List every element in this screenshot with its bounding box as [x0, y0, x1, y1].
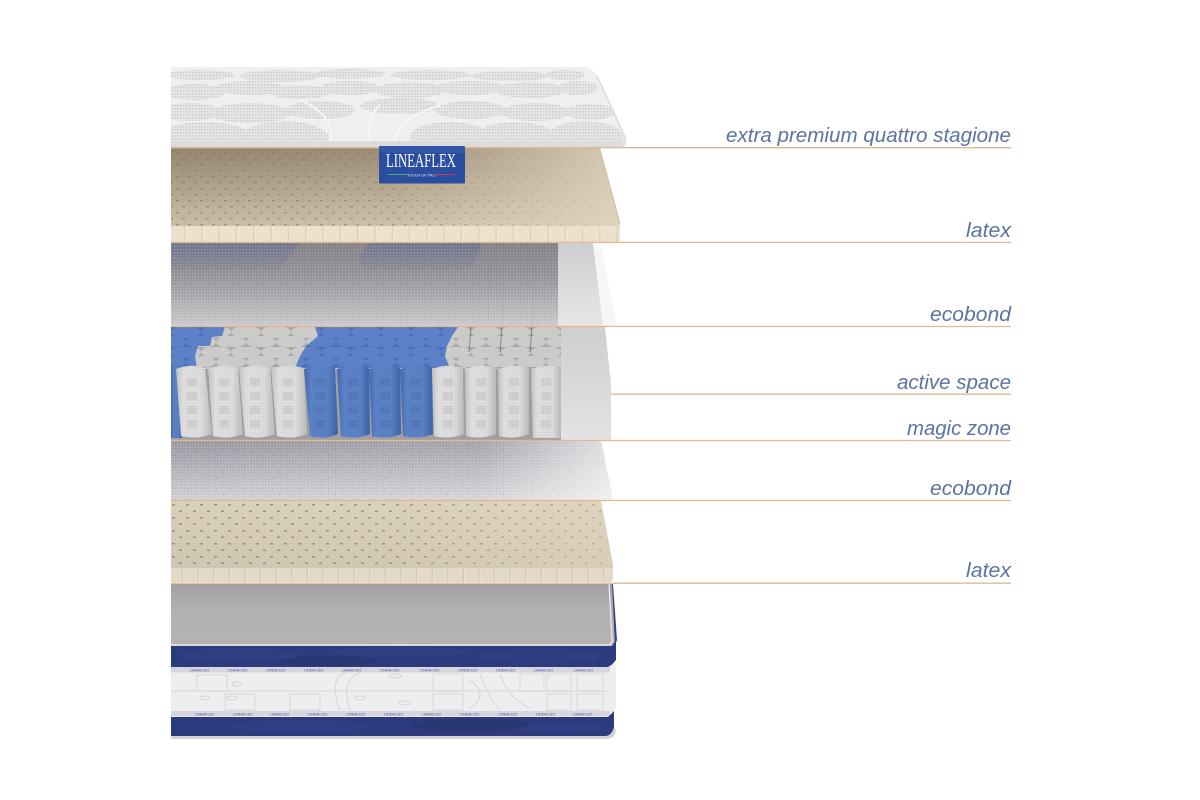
inner tray	[171, 584, 615, 646]
front springs	[171, 365, 561, 438]
quilted white band: LINEAFLEX	[422, 712, 442, 716]
panel: pocket springs layer	[171, 327, 611, 440]
quilted white band: LINEAFLEX	[573, 712, 593, 716]
latex side band	[171, 226, 620, 242]
label: magic zone: magic zone	[907, 418, 1011, 440]
label: active space: active space	[897, 372, 1011, 394]
quilted white band: LINEAFLEX	[380, 668, 400, 672]
quilted white band: LINEAFLEX	[190, 668, 210, 672]
quilted white band: LINEAFLEX	[384, 712, 404, 716]
latex lower side band	[171, 568, 613, 582]
ghost spring pattern	[171, 243, 482, 262]
quilted white band: LINEAFLEX	[460, 712, 480, 716]
label: ecobond: ecobond	[930, 304, 1012, 326]
upper navy band	[171, 640, 616, 667]
quilted white band: LINEAFLEX	[308, 712, 328, 716]
panel: latex layer upper	[171, 148, 620, 242]
quilted white band: LINEAFLEX	[304, 668, 324, 672]
label: extra premium quattro stagione: extra premium quattro stagione	[726, 125, 1011, 147]
quilted white band: LINEAFLEX	[536, 712, 556, 716]
quilted white band: LINEAFLEX	[195, 712, 215, 716]
quilted white band: LINEAFLEX	[233, 712, 253, 716]
latex lower perforation dots	[171, 503, 603, 568]
lower navy band	[171, 711, 614, 736]
panel: ecobond layer lower	[171, 441, 613, 500]
quilted white band	[171, 662, 616, 716]
leader lines	[171, 148, 1011, 583]
label: latex lower: latex	[966, 560, 1012, 582]
quilted white band: LINEAFLEX	[496, 668, 516, 672]
latex perforation dots	[171, 150, 601, 226]
panel: mattress base cover	[171, 584, 617, 739]
quilted white band: LINEAFLEX	[266, 668, 286, 672]
quilted white band: LINEAFLEX	[270, 712, 290, 716]
panel: extra premium quilted top layer	[171, 67, 626, 147]
quilted white band: LINEAFLEX	[498, 712, 518, 716]
back spring rows	[171, 327, 561, 369]
quilted white band: LINEAFLEX	[346, 712, 366, 716]
quilted white band: LINEAFLEX	[228, 668, 248, 672]
quilted white band: LINEAFLEX	[420, 668, 440, 672]
quilted white band: LINEAFLEX	[458, 668, 478, 672]
logo label: Lineaflex: LINEAFLEX	[386, 150, 456, 172]
quilted white band: LINEAFLEX	[534, 668, 554, 672]
logo label: Lineaflex: TOUCH OF ITALY	[407, 173, 437, 177]
panel: latex layer lower	[171, 501, 613, 582]
quilted white band: LINEAFLEX	[574, 668, 594, 672]
label: ecobond lower: ecobond	[930, 478, 1012, 500]
logo label: Lineaflex	[379, 146, 465, 184]
quilted white band: LINEAFLEX	[342, 668, 362, 672]
label: latex: latex	[966, 220, 1012, 242]
panel: ecobond layer upper	[171, 243, 617, 326]
